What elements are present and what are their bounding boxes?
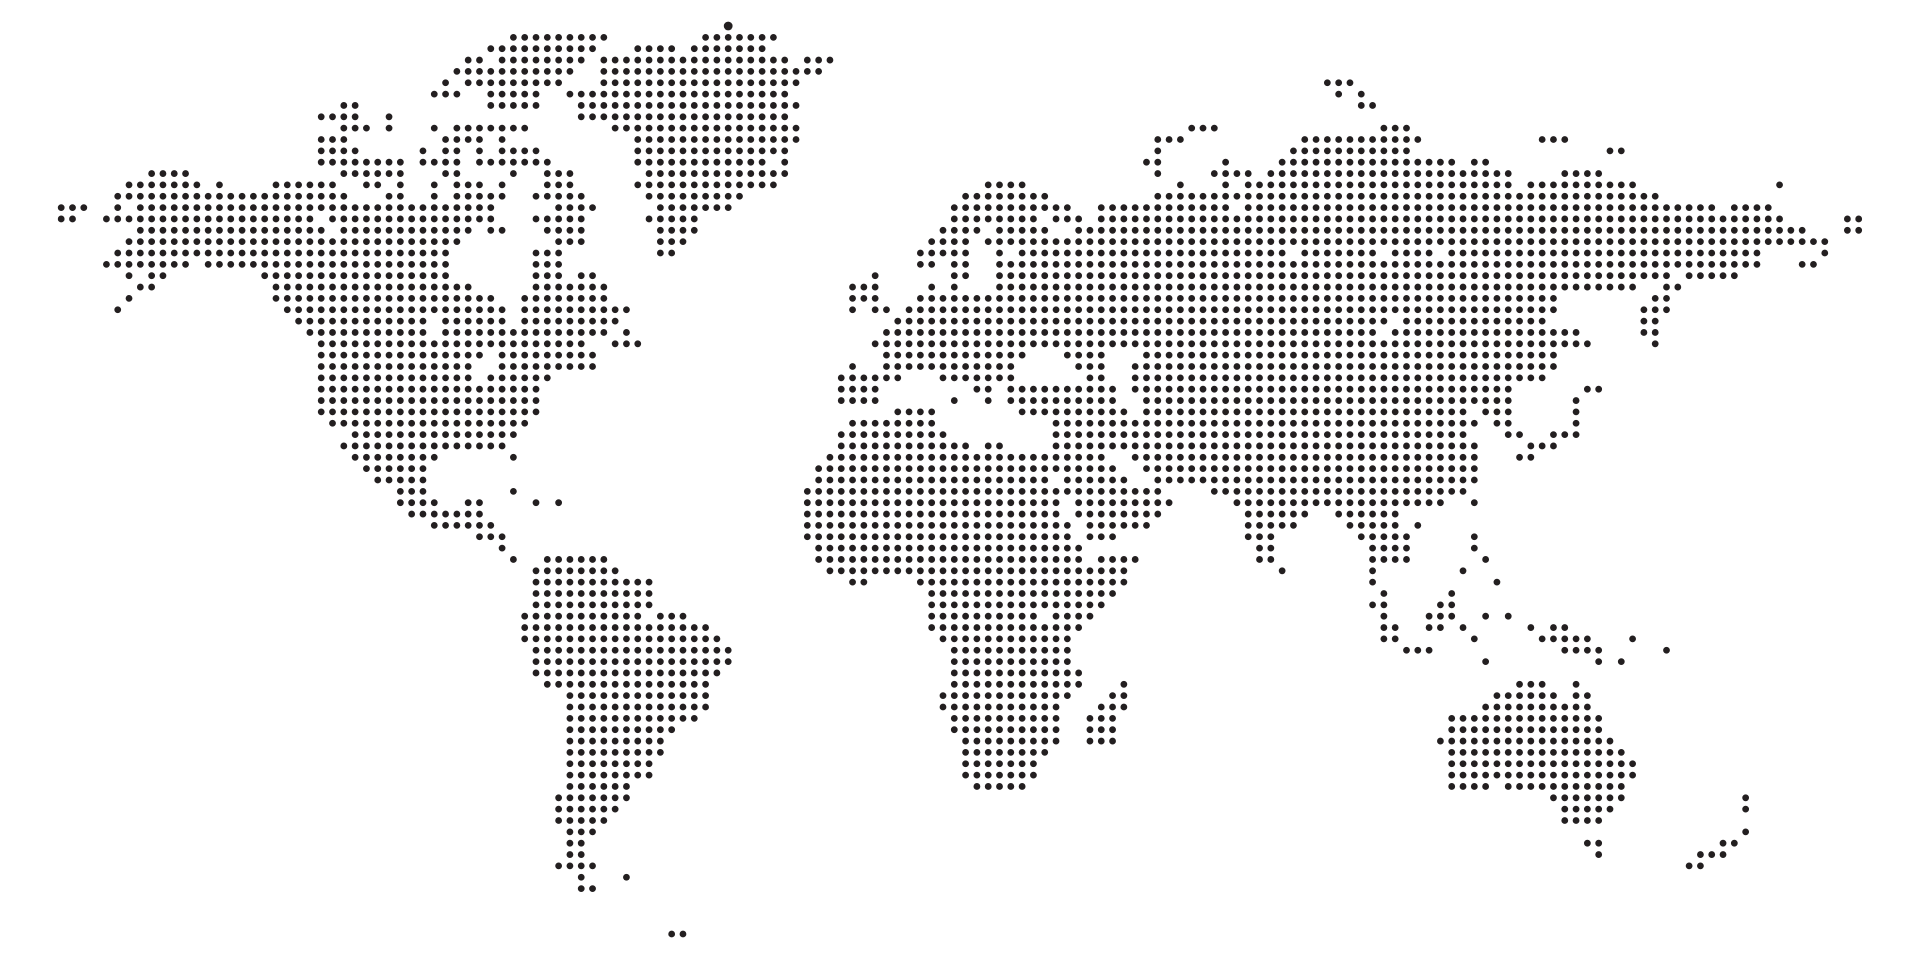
landmass: Southeast Asia islands bbox=[1282, 571, 1668, 662]
marker: enlarged dot north of Greenland bbox=[728, 25, 729, 27]
landmass: Australia bbox=[1440, 684, 1634, 820]
landmass: North America bbox=[106, 37, 639, 559]
landmass: Madagascar bbox=[1090, 684, 1125, 741]
landmass: Antarctic tip dots bbox=[672, 933, 684, 935]
landmass: New Zealand bbox=[1689, 798, 1747, 866]
landmass: Africa and Arabia bbox=[807, 412, 1170, 786]
landmass: Great Britain and Ireland bbox=[853, 276, 888, 310]
landmass: Eurasia bbox=[841, 128, 1826, 559]
landmass: Greenland bbox=[570, 37, 831, 253]
landmass: South America bbox=[525, 559, 729, 889]
landmass: Aleutian tip dots bbox=[61, 208, 85, 219]
landmass: far east dots bbox=[1847, 219, 1860, 230]
landmass: Arctic islands bbox=[1146, 83, 1622, 174]
landmass: Tasmania bbox=[1587, 843, 1600, 855]
landmass: Falkland dot bbox=[626, 876, 628, 878]
